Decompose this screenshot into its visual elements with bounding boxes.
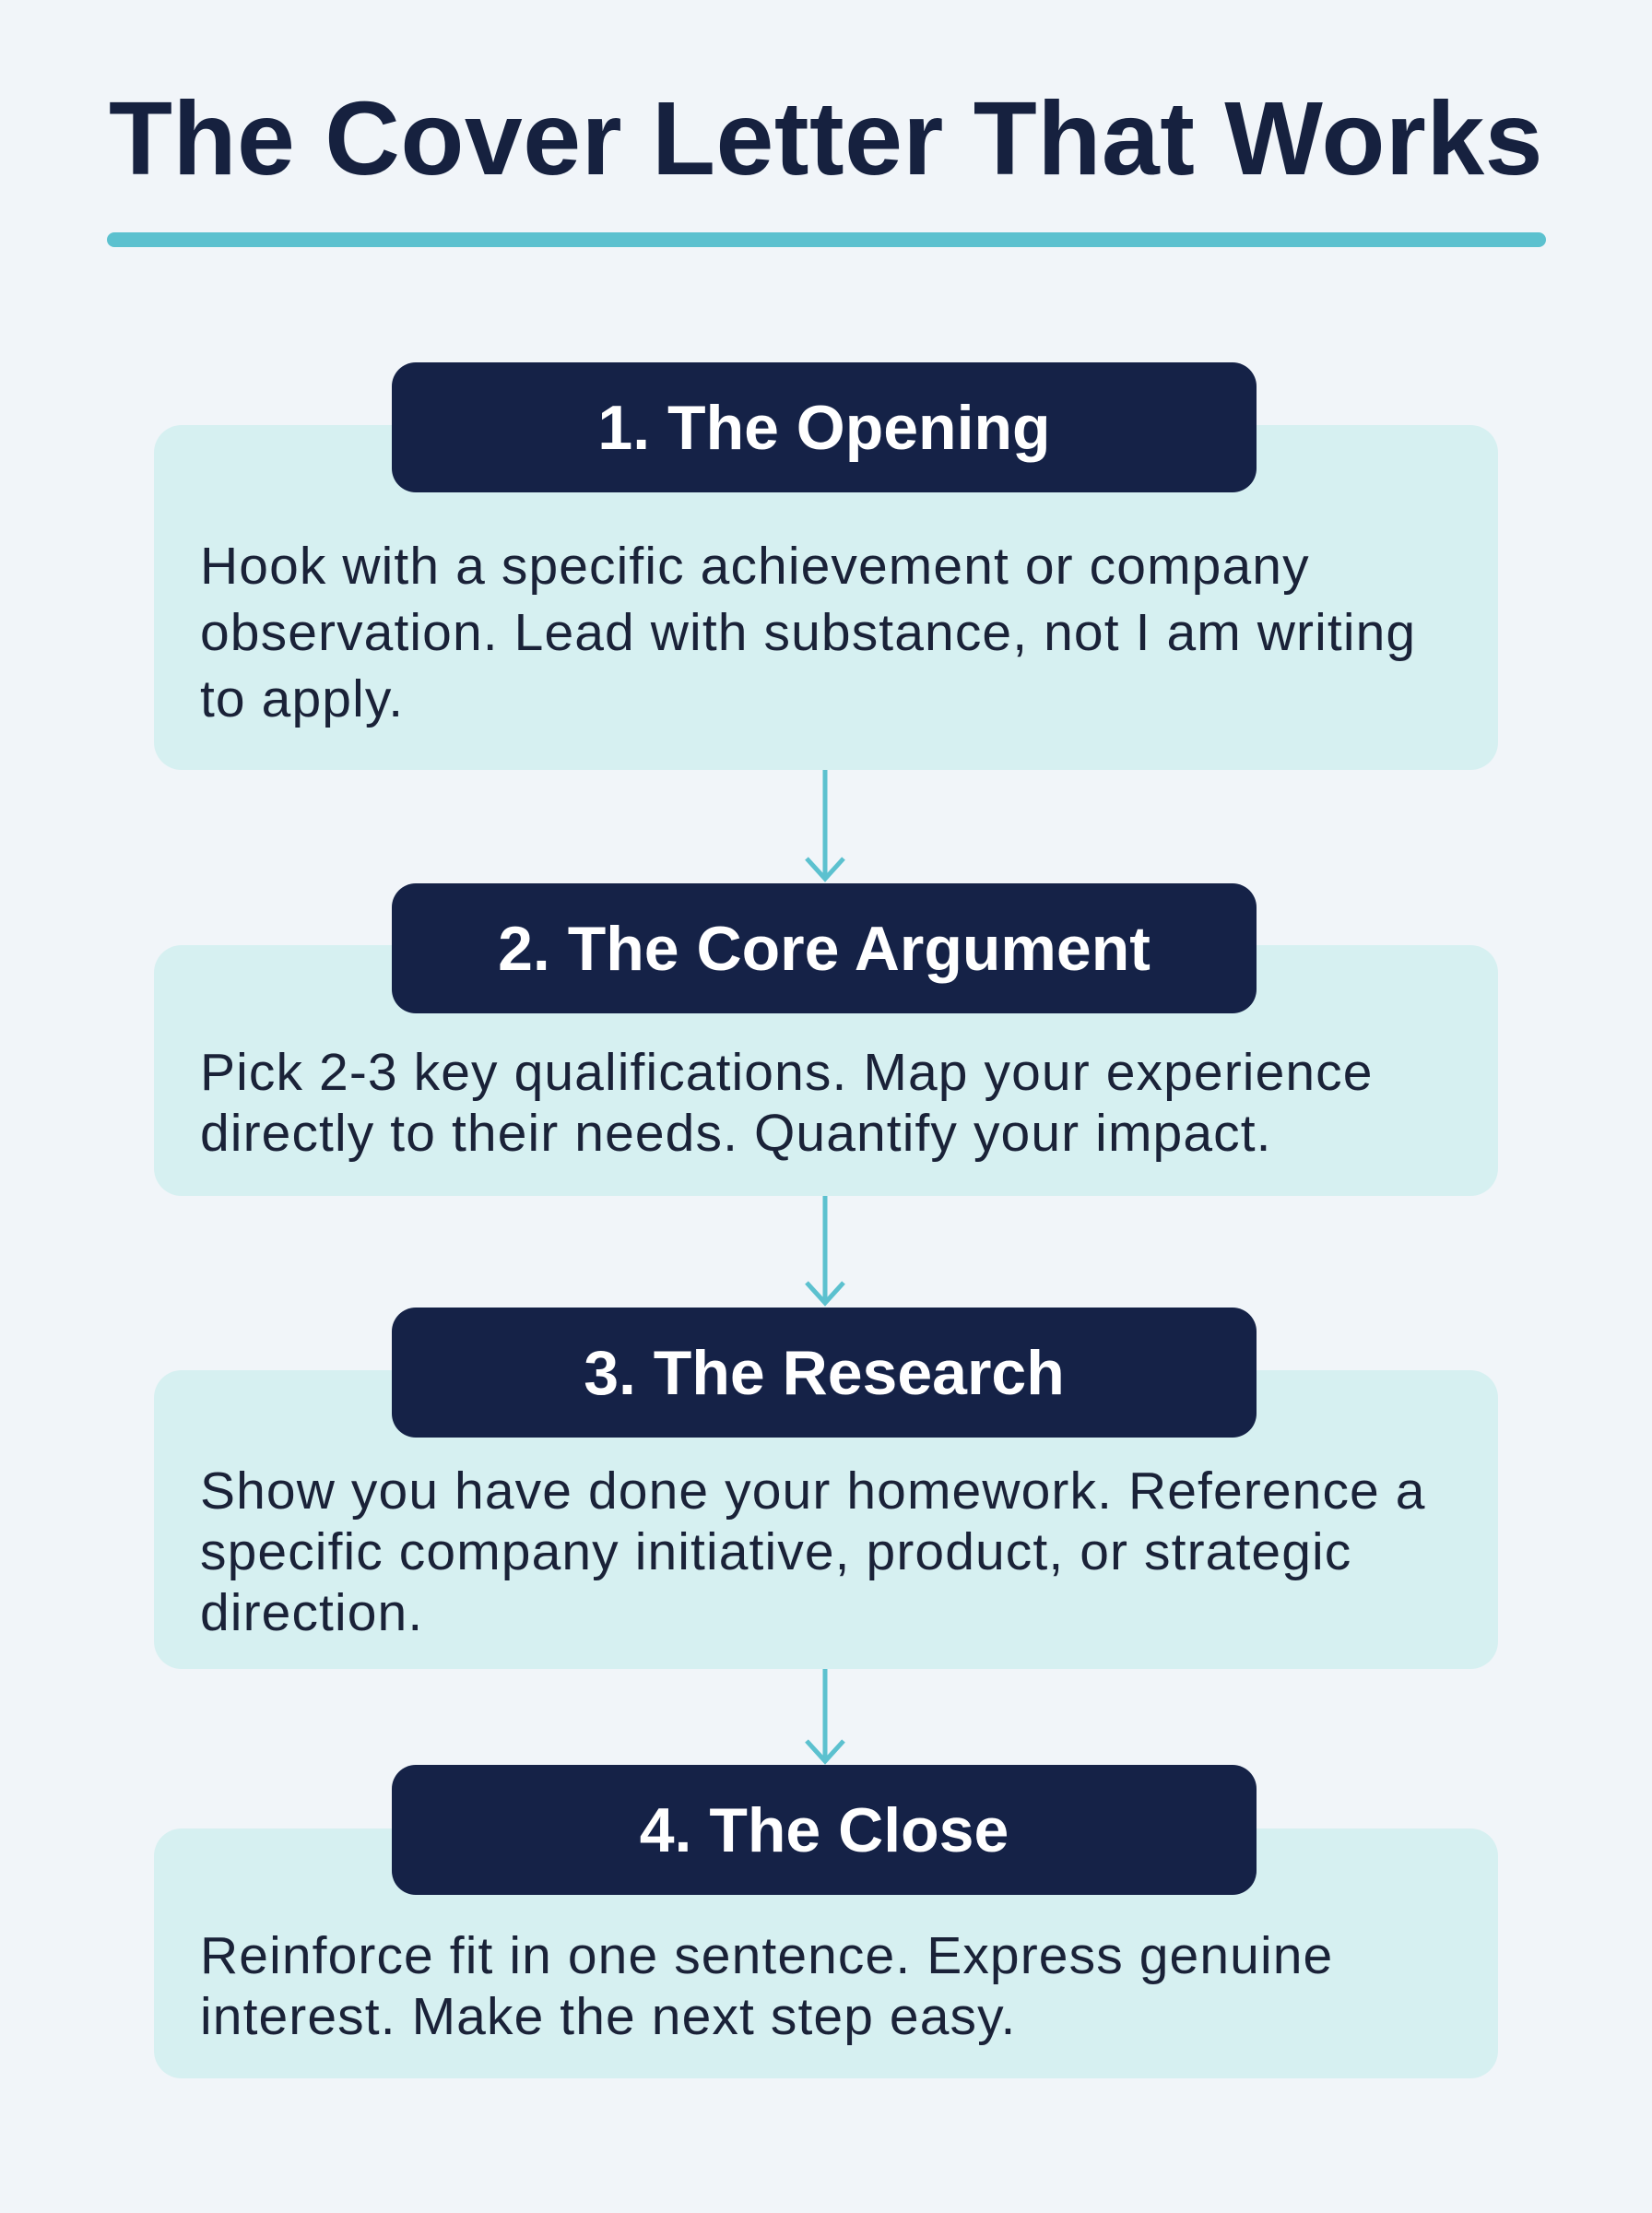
panel: opening [154, 425, 1498, 770]
text: opening: Hook with a specific achievement or company [200, 537, 1310, 596]
text: close: Reinforce fit in one sentence. Express genuine [200, 1926, 1333, 1985]
arrow 2 [805, 1196, 845, 1307]
header: research: 3. The Research [584, 1337, 1065, 1407]
text: research: Show you have done your homework. Reference a [200, 1462, 1426, 1521]
header: research [392, 1308, 1257, 1438]
text: close: interest. Make the next step easy. [200, 1987, 1016, 2046]
title: The Cover Letter That Works [109, 80, 1543, 196]
text: opening [200, 537, 1416, 728]
text: core argument [200, 1043, 1374, 1163]
panel: core argument [154, 945, 1498, 1196]
arrow 3 [805, 1669, 845, 1765]
text: core argument: Pick 2-3 key qualifications. Map your experience [200, 1043, 1374, 1102]
text: research: specific company initiative, product, or strategic [200, 1522, 1351, 1581]
header: opening [392, 362, 1257, 492]
text: close [200, 1926, 1333, 2046]
panel: close [154, 1828, 1498, 2078]
header: close [392, 1765, 1257, 1895]
text: opening: to apply. [200, 669, 404, 728]
header: core argument: 2. The Core Argument [498, 913, 1150, 983]
header: core argument [392, 883, 1257, 1013]
header: close: 4. The Close [640, 1794, 1009, 1864]
text: research [200, 1462, 1426, 1642]
panel: research [154, 1370, 1498, 1669]
arrow 1 [805, 770, 845, 882]
text: research: direction. [200, 1583, 423, 1642]
header: opening: 1. The Opening [597, 393, 1051, 463]
text: opening: observation. Lead with substance, not I am writing [200, 603, 1416, 662]
text: core argument: directly to their needs. Quantify your impact. [200, 1104, 1272, 1163]
